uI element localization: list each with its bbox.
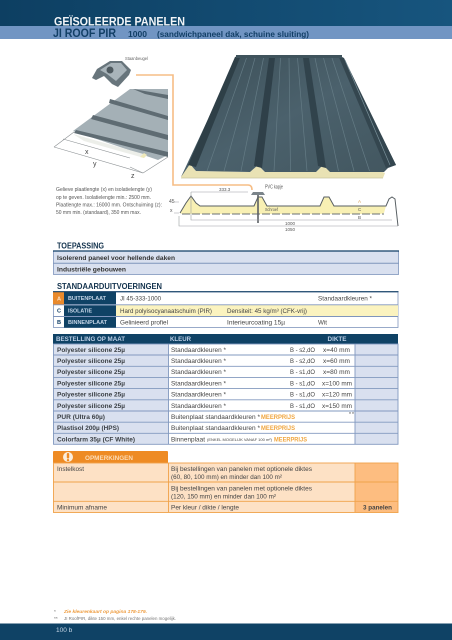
table: bestelling op maat: (ENKEL MOGELIJK VANAF 100 m²) xyxy=(207,438,272,442)
table: bestelling op maat: Polyester silicone 25µ xyxy=(57,403,125,410)
table: bestelling op maat: Polyester silicone 25µ xyxy=(57,347,125,354)
footer band xyxy=(0,624,452,640)
table: opmerkingen: Bij bestellingen van panelen met optionele diktes xyxy=(171,486,312,492)
note text: Gelieve plaatlengte (x) en isolatielengte (y) xyxy=(56,187,152,193)
cross-section labels: x xyxy=(170,208,173,214)
cross-section labels: PVC kapje xyxy=(265,184,283,190)
dimension letters: y xyxy=(93,161,97,168)
table: opmerkingen: (120, 150 mm) en minder dan 100 m² xyxy=(171,494,276,500)
table: bestelling op maat xyxy=(53,334,398,444)
table: bestelling op maat: Standaardkleuren * xyxy=(171,403,227,410)
table: bestelling op maat: x=120 mm xyxy=(322,392,352,399)
footnotes: ** xyxy=(54,616,58,622)
cross-section labels: A xyxy=(358,199,361,204)
dimension letters xyxy=(85,149,135,180)
table header: KLEUR xyxy=(170,337,192,343)
note text: Plaatlengte max.: 16000 mm. Ontschuiming (z): xyxy=(56,202,162,208)
cross-section drawing xyxy=(174,192,398,226)
table: bestelling op maat: B - s1,dO xyxy=(290,403,315,410)
table: bestelling op maat: Polyester silicone 25µ xyxy=(57,392,125,399)
table: standaarduitvoeringen: B xyxy=(57,320,61,326)
table: bestelling op maat: B - s2,dO xyxy=(290,347,315,354)
table: standaarduitvoeringen: Hard polyisocyanaatschuim (PIR) xyxy=(120,308,212,315)
footnotes: * xyxy=(54,609,56,615)
table: standaarduitvoeringen: Densiteit: 45 kg/m³ (CFK-vrij) xyxy=(227,308,307,315)
table: bestelling op maat: x=60 mm xyxy=(323,358,350,365)
header band xyxy=(0,0,452,39)
cross-section labels xyxy=(169,184,362,232)
note text xyxy=(56,187,162,216)
table: standaarduitvoeringen xyxy=(53,292,398,328)
subtitle: (sandwichpaneel dak, schuine sluiting) xyxy=(157,30,309,39)
note text: op te geven. Isolatielengte min.: 2500 mm. xyxy=(56,195,151,201)
heading: toepassing: TOEPASSING xyxy=(57,242,104,250)
icon: warning xyxy=(63,452,73,462)
connector line xyxy=(136,75,252,190)
dimension lines x y z xyxy=(54,132,168,173)
table: bestelling op maat: Buitenplaat standaardkleuren * xyxy=(171,414,261,421)
title: GEÏSOLEERDE PANELEN xyxy=(54,14,185,28)
dimension letters: x xyxy=(85,149,89,156)
icon: bracket xyxy=(92,61,131,87)
cross-section labels: B xyxy=(358,215,361,220)
table: bestelling op maat: ** xyxy=(349,412,354,418)
cross-section labels: 45 xyxy=(169,199,175,205)
cross-section labels: 333.3 xyxy=(219,187,231,192)
table header: DIKTE xyxy=(328,337,346,343)
cross-section labels: 1000 xyxy=(285,221,296,226)
table: opmerkingen: Bij bestellingen van panelen met optionele diktes xyxy=(171,466,312,473)
cross-section labels: 1050 xyxy=(285,227,296,232)
table: bestelling op maat: Standaardkleuren * xyxy=(171,347,227,354)
table: bestelling op maat: Binnenplaat xyxy=(171,436,205,443)
foam edge xyxy=(181,164,385,178)
footer band: 100 b xyxy=(56,627,73,634)
table: bestelling op maat: x=80 mm xyxy=(323,369,350,376)
table: standaarduitvoeringen: BUITENPLAAT xyxy=(68,296,107,302)
table: bestelling op maat: Standaardkleuren * xyxy=(171,392,227,399)
table: standaarduitvoeringen: C xyxy=(57,308,61,314)
table: bestelling op maat: Colorfarm 35µ (CF White) xyxy=(57,436,135,443)
table: bestelling op maat: x=40 mm xyxy=(323,347,350,354)
table: bestelling op maat: Standaardkleuren * xyxy=(171,358,227,365)
table: bestelling op maat: Polyester silicone 25µ xyxy=(57,358,125,365)
table: bestelling op maat: Standaardkleuren * xyxy=(171,380,227,387)
table: standaarduitvoeringen: A xyxy=(57,296,61,302)
table: bestelling op maat: B - s1,dO xyxy=(290,369,315,376)
table: standaarduitvoeringen: BINNENPLAAT xyxy=(68,320,108,326)
table: bestelling op maat: Standaardkleuren * xyxy=(171,369,227,376)
table: standaarduitvoeringen: Gelinieerd profiel xyxy=(120,320,168,326)
sandwich panel illustration xyxy=(181,55,396,178)
cross-section labels: C xyxy=(358,207,362,212)
table: bestelling op maat: Buitenplaat standaardkleuren * xyxy=(171,425,261,432)
table: bestelling op maat: Plastisol 200µ (HPS) xyxy=(57,425,119,432)
table: toepassing: Isolerend paneel voor hellende daken xyxy=(57,255,175,262)
bracket label: Staanbeugel xyxy=(125,56,148,61)
table: standaarduitvoeringen: ISOLATIE xyxy=(68,308,92,314)
tab: opmerkingen: OPMERKINGEN xyxy=(85,456,133,462)
table: bestelling op maat: B - s2,dO xyxy=(290,358,315,365)
table: bestelling op maat: PUR (Ultra 60µ) xyxy=(57,414,105,421)
panel detail xyxy=(73,89,168,160)
subtitle: 1000 xyxy=(128,29,147,39)
table: opmerkingen: 3 panelen xyxy=(363,504,392,512)
table: standaarduitvoeringen: Wit xyxy=(318,320,327,326)
table header: BESTELLING OP MAAT xyxy=(56,337,125,343)
table: toepassing: Industriële gebouwen xyxy=(57,266,126,273)
table: bestelling op maat: B - s1,dO xyxy=(290,392,315,399)
footnotes: Zie kleurenkaart op pagina 178-179. xyxy=(63,609,147,615)
subtitle xyxy=(53,26,309,40)
tab: opmerkingen xyxy=(53,451,168,464)
table: bestelling op maat: MEERPRIJS xyxy=(274,436,308,443)
table: standaarduitvoeringen: Standaardkleuren * xyxy=(318,296,373,302)
table: standaarduitvoeringen: Interieurcoating 15µ xyxy=(227,320,285,326)
table: opmerkingen: (60, 80, 100 mm) en minder dan 100 m² xyxy=(171,474,282,481)
table header xyxy=(53,334,398,344)
footnotes: JI RoofPIR, dikte 150 mm, enkel rechte panelen mogelijk. xyxy=(64,616,176,622)
heading: standaarduitvoeringen: STANDAARDUITVOERINGEN xyxy=(57,282,162,291)
table: bestelling op maat: Polyester silicone 25µ xyxy=(57,380,125,387)
table: opmerkingen xyxy=(53,463,398,512)
table: bestelling op maat: MEERPRIJS xyxy=(261,414,296,421)
table: toepassing xyxy=(53,251,399,274)
table: opmerkingen: Minimum afname xyxy=(57,504,108,512)
table: bestelling op maat: x=150 mm xyxy=(322,403,352,410)
table: bestelling op maat: B - s1,dO xyxy=(290,380,315,387)
table: bestelling op maat: MEERPRIJS xyxy=(261,425,296,432)
table: opmerkingen: Instelkost xyxy=(57,466,84,473)
subtitle: JI ROOF PIR xyxy=(53,26,116,40)
table: opmerkingen: Per kleur / dikte / lengte xyxy=(171,504,240,512)
dimension letters: z xyxy=(131,173,135,180)
cross-section labels: Schroef xyxy=(265,207,279,212)
table: standaarduitvoeringen: JI 45-333-1000 xyxy=(120,296,161,302)
note text: 50 mm min. (standaard), 350 mm max. xyxy=(56,210,141,216)
table: bestelling op maat: x=100 mm xyxy=(322,380,352,387)
footnotes xyxy=(54,609,176,622)
table: bestelling op maat: Polyester silicone 25µ xyxy=(57,369,125,376)
